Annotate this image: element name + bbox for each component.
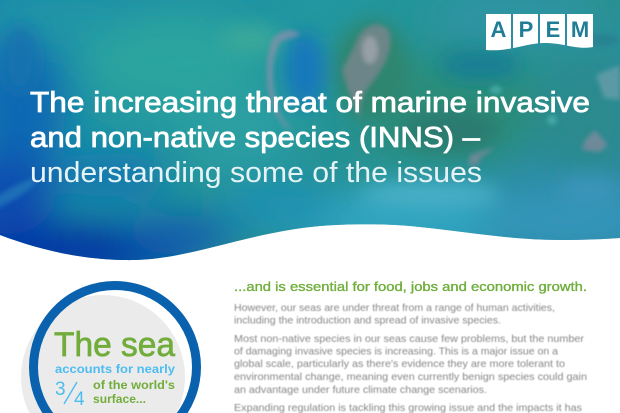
body text: environmental change, meaning even currently benign species could gain	[234, 371, 587, 383]
logo: APEM: P	[519, 17, 533, 42]
callout text: accounts for nearly	[55, 362, 175, 376]
title: understanding some of the issues	[30, 157, 482, 189]
title: The increasing threat of marine invasive	[30, 87, 590, 119]
callout text	[54, 326, 175, 410]
body text	[234, 302, 587, 413]
title: and non-native species (INNS) –	[30, 122, 481, 154]
body text: an advantage under future climate change scenarios.	[234, 384, 487, 396]
callout text: 4	[74, 389, 85, 410]
callout text: 3	[55, 379, 66, 400]
callout text: The sea	[54, 326, 175, 364]
logo: APEM: E	[546, 17, 560, 42]
callout text: surface...	[93, 392, 146, 406]
grey disc	[21, 295, 185, 413]
body text: Most non-native species in our seas cause few problems, but the number	[234, 333, 585, 345]
callout text: of the world's	[93, 378, 175, 392]
body text: However, our seas are under threat from a range of human activities,	[234, 302, 555, 314]
body text: of damaging invasive species is increasing. This is a major issue on a	[234, 346, 558, 358]
body text: global scale, particularly as there's evidence they are more tolerant to	[234, 358, 565, 370]
blue ring	[34, 286, 196, 413]
logo: APEM: A	[491, 17, 507, 42]
callout circle: the sea	[21, 286, 196, 413]
title	[30, 87, 590, 189]
subheading: ...and is essential for food, jobs and economic growth.	[234, 279, 587, 294]
logo: APEM: M	[571, 17, 589, 42]
body text: including the introduction and spread of invasive species.	[234, 314, 501, 326]
crescent island	[267, 30, 300, 130]
header: satellite sea image with wave edge	[0, 0, 620, 280]
logo: APEM	[486, 14, 593, 52]
